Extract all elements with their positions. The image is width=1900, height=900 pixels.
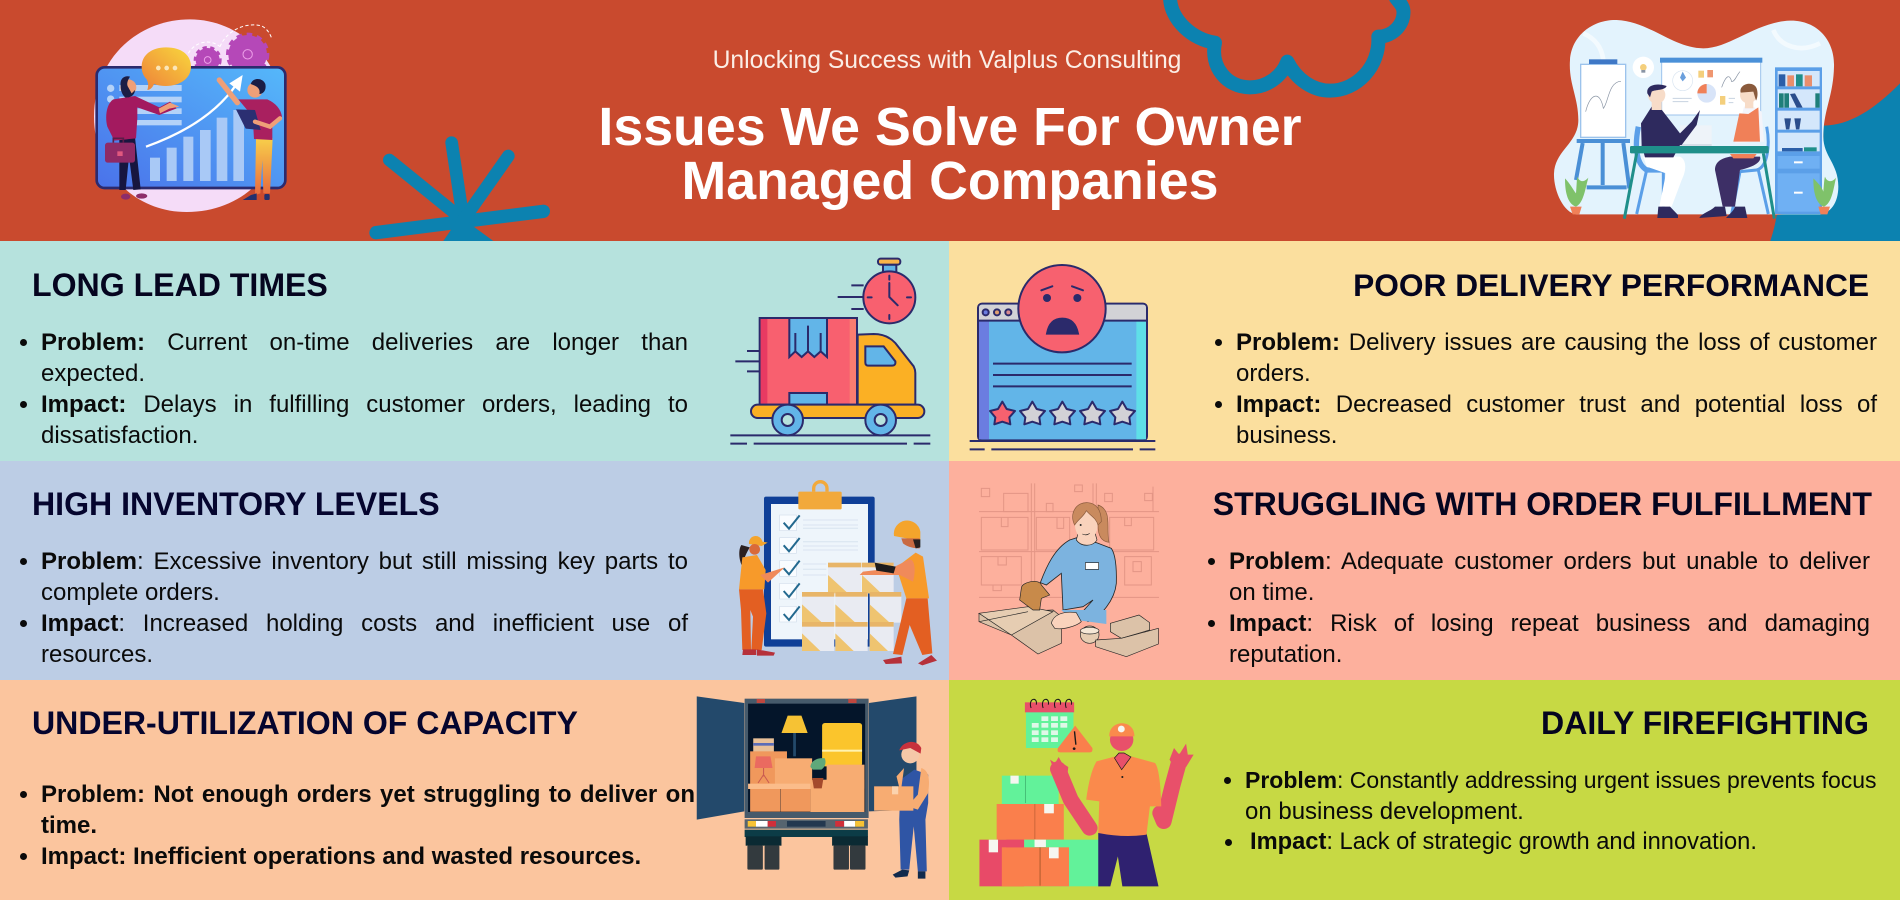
text block	[1208, 548, 1870, 668]
subtitle: Unlocking Success with Valplus Consulting	[713, 47, 1181, 74]
decoration: teal star	[369, 136, 550, 241]
text block: Problem: Excessive inventory but still missing key parts to complete orders.	[41, 548, 688, 606]
heading: DAILY FIREFIGHTING	[1541, 705, 1869, 741]
text block: Impact: Inefficient operations and wasted resources.	[41, 843, 641, 870]
title: Issues We Solve For Owner	[598, 97, 1302, 157]
icon: open moving truck with worker	[696, 696, 929, 879]
text block: Problem: Delivery issues are causing the loss of customer orders.	[1236, 329, 1877, 387]
text block: Problem: Current on-time deliveries are longer than expected.	[41, 329, 688, 387]
panel: daily firefighting	[949, 680, 1900, 900]
panel: struggling with order fulfillment	[949, 461, 1900, 680]
text block: Impact: Lack of strategic growth and innovation.	[1250, 829, 1757, 855]
heading: UNDER-UTILIZATION OF CAPACITY	[32, 705, 578, 741]
text block: Impact: Decreased customer trust and potential loss of business.	[1236, 391, 1877, 449]
text block	[1224, 767, 1877, 855]
text block: Problem: Not enough orders yet struggling to deliver on time.	[41, 781, 695, 839]
text block: Problem: Constantly addressing urgent issues prevents focus	[1245, 767, 1877, 793]
panel: long lead times	[0, 241, 949, 461]
icon: workers checking inventory clipboard	[739, 480, 937, 666]
icon: worker taping a parcel	[978, 484, 1159, 657]
header banner	[0, 0, 1900, 241]
icon: stressed worker with boxes and calendar	[979, 698, 1194, 886]
illustration: two consultants presenting a growth chart	[94, 19, 287, 212]
heading: HIGH INVENTORY LEVELS	[32, 486, 440, 522]
text block	[20, 548, 688, 668]
text block: Impact: Delays in fulfilling customer orders, leading to dissatisfaction.	[41, 391, 688, 449]
icon: delivery truck with stopwatch	[730, 258, 930, 445]
heading: POOR DELIVERY PERFORMANCE	[1353, 267, 1869, 303]
text block: Impact: Risk of losing repeat business and damaging reputation.	[1229, 610, 1870, 668]
text block: on business development.	[1245, 798, 1524, 825]
title: Managed Companies	[682, 151, 1218, 211]
text block: Problem: Adequate customer orders but unable to deliver on time.	[1229, 548, 1870, 606]
text block	[1215, 329, 1878, 449]
heading: LONG LEAD TIMES	[32, 267, 328, 303]
decoration: teal cloud outline	[1163, 0, 1410, 98]
title	[598, 97, 1302, 211]
icon: unhappy face over web review page	[970, 264, 1156, 450]
text block: Impact: Increased holding costs and inefficient use of resources.	[41, 610, 688, 668]
illustration: business meeting around a table	[1554, 20, 1838, 219]
decoration: teal corner shape	[1770, 84, 1900, 241]
text block	[20, 781, 695, 870]
panel: high inventory levels	[0, 461, 949, 680]
panel: under-utilization of capacity	[0, 680, 949, 900]
heading: STRUGGLING WITH ORDER FULFILLMENT	[1213, 486, 1872, 522]
text block	[20, 329, 688, 449]
panel: poor delivery performance	[949, 241, 1900, 461]
